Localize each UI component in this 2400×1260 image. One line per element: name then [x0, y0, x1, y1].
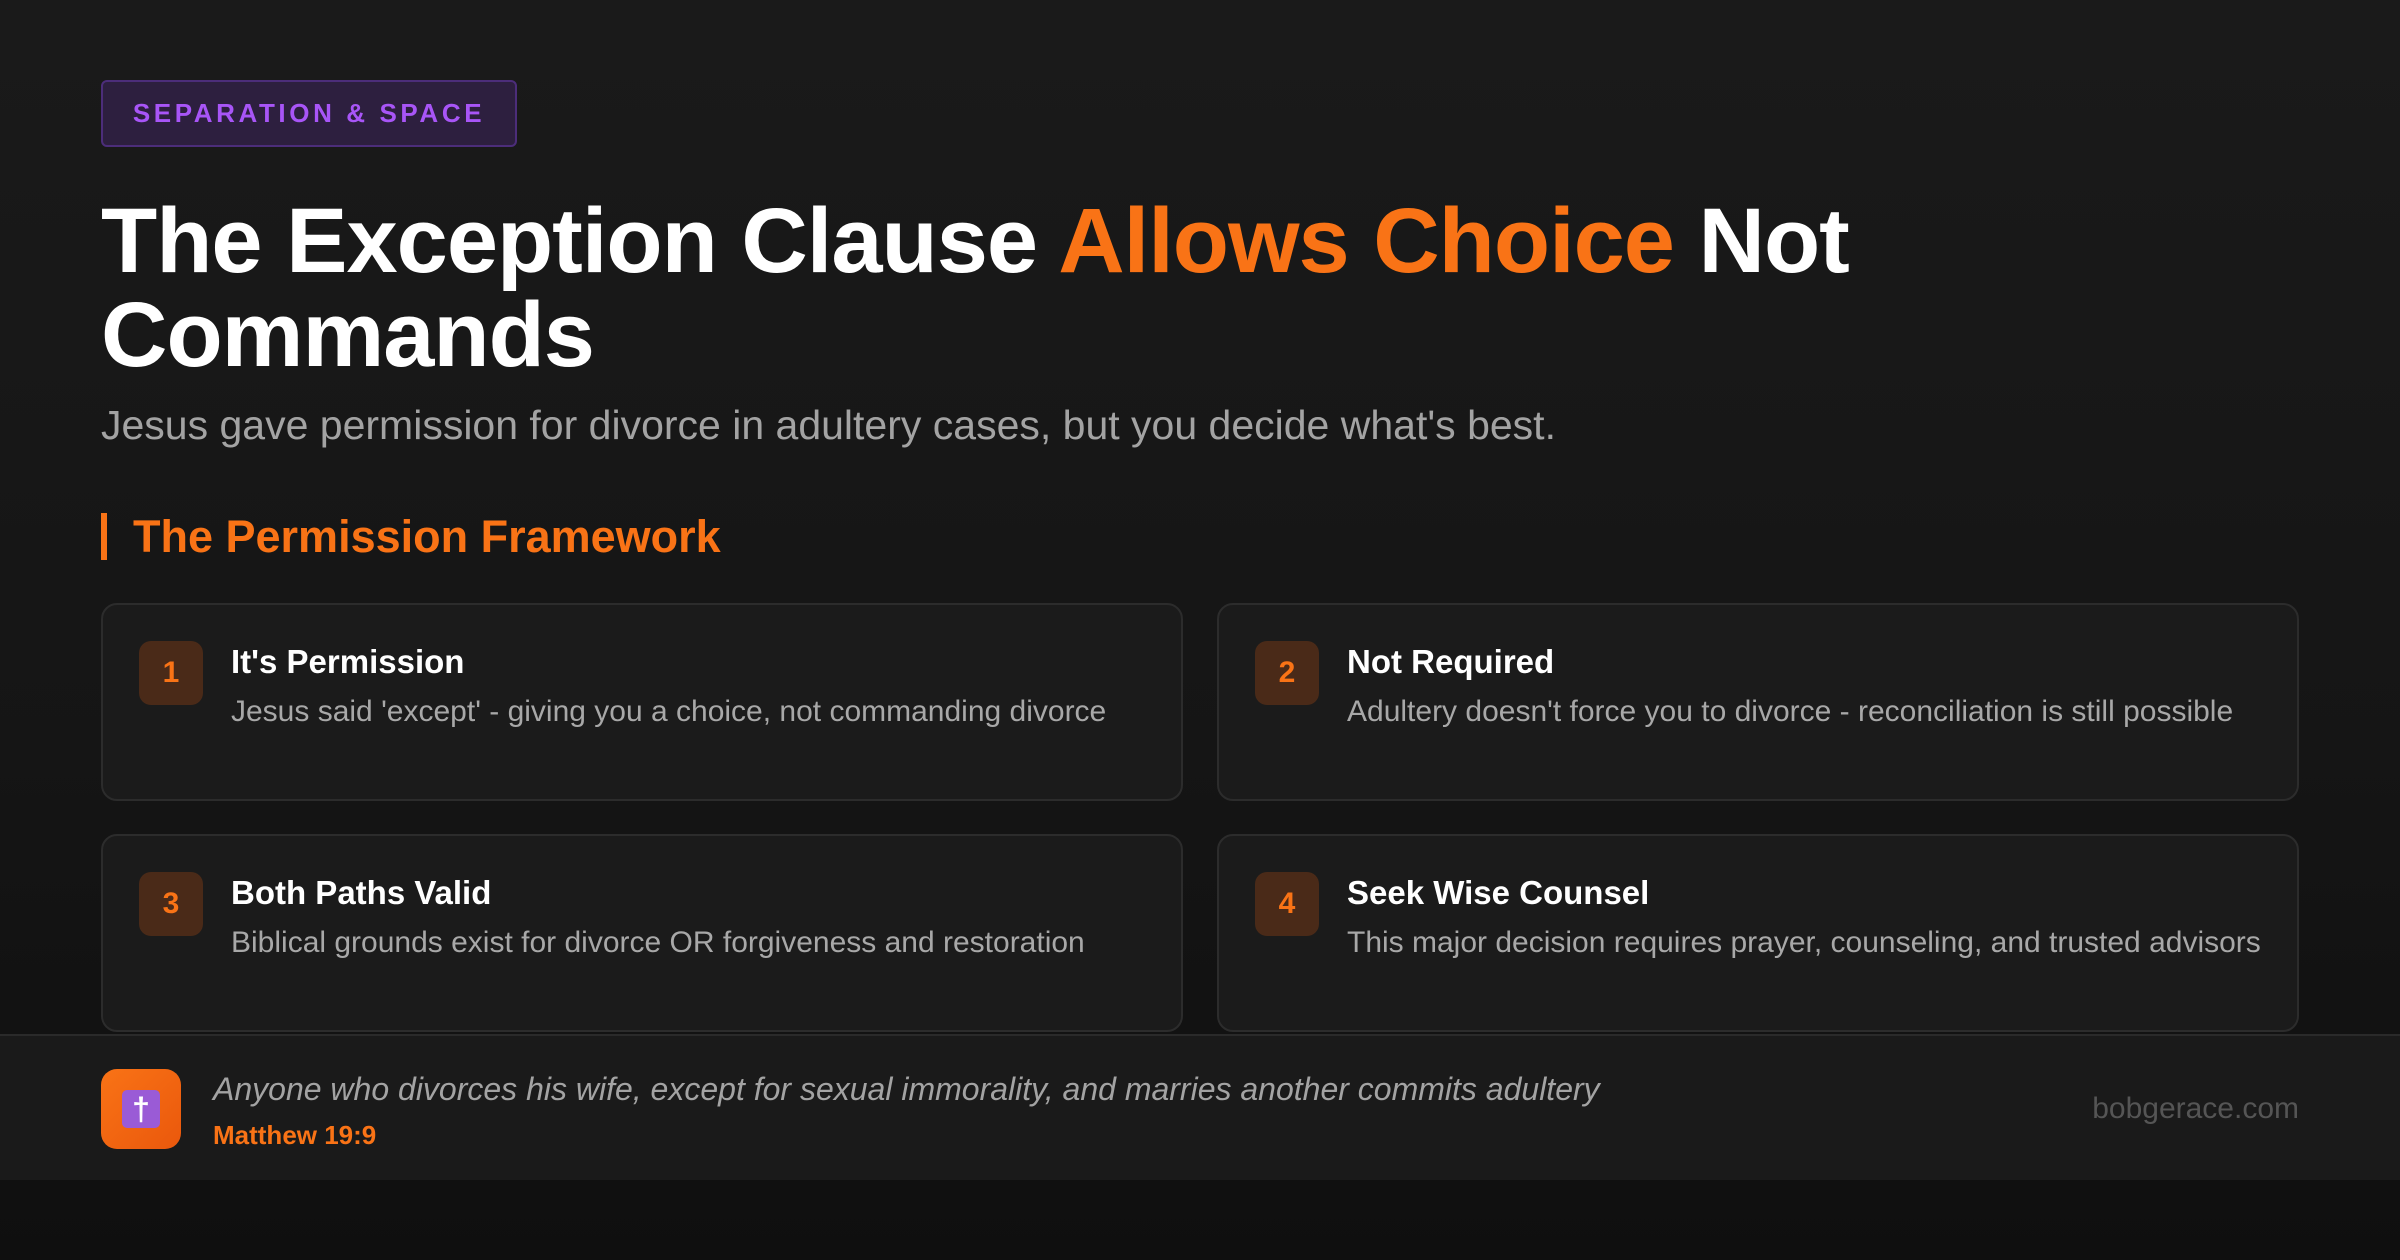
number 3: 3: [163, 887, 179, 920]
number 2: 2: [1279, 656, 1295, 689]
footer: [0, 1034, 2400, 1180]
subtitle: Jesus gave permission for divorce in adultery cases, but you decide what's best.: [101, 402, 1556, 448]
card 2: [1217, 603, 2299, 801]
site: bobgerace.com: [2092, 1092, 2299, 1125]
number 1: 1: [163, 656, 179, 689]
icon: cross: [101, 1069, 181, 1149]
number 4: [1255, 872, 1319, 936]
card title 3: Both Paths Valid: [231, 874, 491, 911]
card title 4: Seek Wise Counsel: [1347, 874, 1649, 911]
card title 1: It's Permission: [231, 643, 464, 680]
title: The Exception Clause Allows Choice Not Commands: [101, 190, 1849, 386]
number 1: [139, 641, 203, 705]
badge: SEPARATION & SPACE: [133, 98, 485, 128]
section heading: The Permission Framework: [133, 511, 721, 562]
reference: Matthew 19:9: [213, 1120, 376, 1150]
icon: cross: †: [132, 1090, 150, 1126]
card desc 1: Jesus said 'except' - giving you a choice, not commanding divorce: [231, 695, 1106, 728]
card desc 4: This major decision requires prayer, counseling, and trusted advisors: [1347, 926, 2261, 959]
quote: Anyone who divorces his wife, except for sexual immorality, and marries another commits adultery: [213, 1071, 1600, 1107]
number 2: [1255, 641, 1319, 705]
card desc 2: Adultery doesn't force you to divorce - reconciliation is still possible: [1347, 695, 2233, 728]
card 3: [101, 834, 1183, 1032]
card desc 3: Biblical grounds exist for divorce OR forgiveness and restoration: [231, 926, 1085, 959]
number 3: [139, 872, 203, 936]
number 4: 4: [1279, 887, 1295, 920]
card title 2: Not Required: [1347, 643, 1554, 680]
badge: [101, 80, 517, 147]
card 1: [101, 603, 1183, 801]
card 4: [1217, 834, 2299, 1032]
